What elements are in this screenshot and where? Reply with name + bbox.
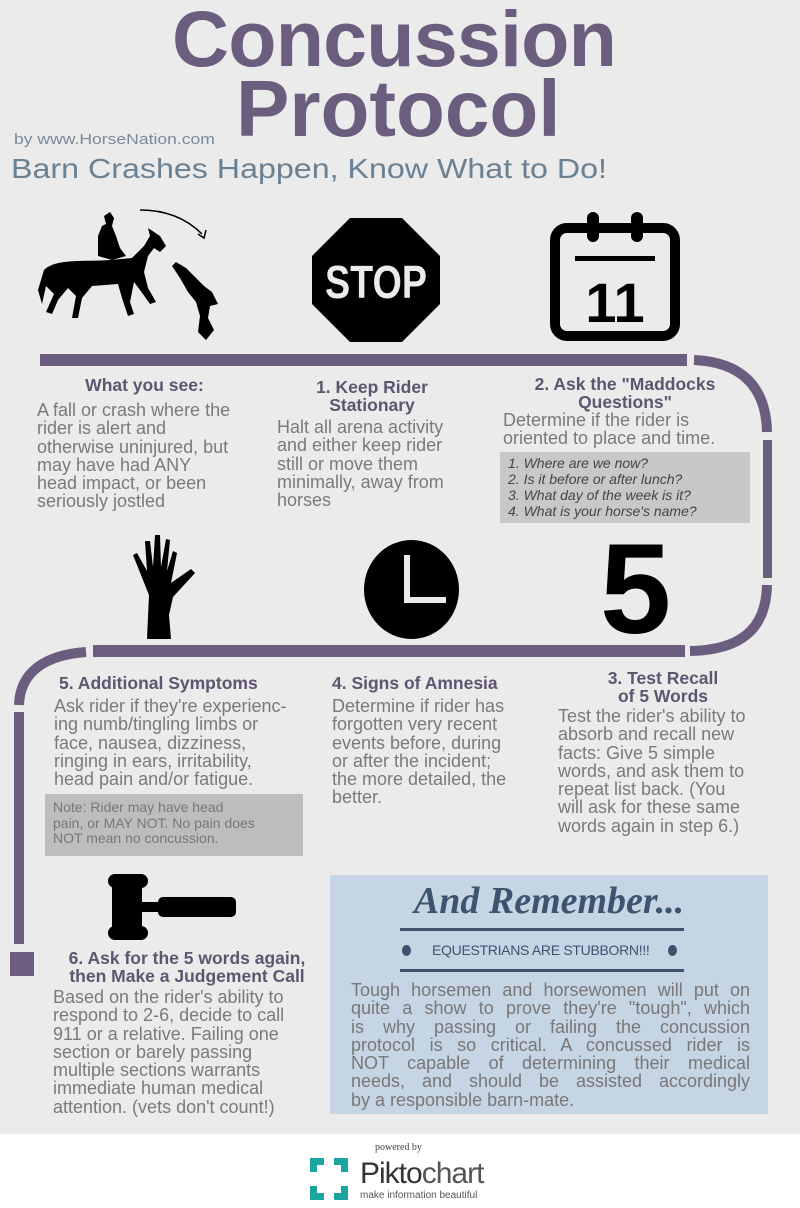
panel: step 6: 6. Ask for the 5 words again, (69, 948, 305, 968)
panel: step 1: Halt all arena activity (277, 417, 443, 437)
body text: quite a show to prove they're "tough", which (351, 998, 750, 1018)
logo: piktochart: make information beautiful (360, 1190, 477, 1201)
panel: step 4: 4. Signs of Amnesia (332, 673, 498, 693)
body text: protocol is so critical. A concussed rider is (351, 1035, 750, 1055)
panel: step 5: face, nausea, dizziness, (54, 733, 246, 753)
panel: step 1: horses (277, 490, 331, 510)
panel: step 5: 5. Additional Symptoms (59, 673, 258, 693)
panel: step 3: facts: Give 5 simple (558, 743, 715, 763)
title: Protocol (236, 64, 560, 153)
panel: step 2: Determine if the rider is (503, 410, 689, 430)
panel: step 3: Test the rider's ability to (558, 706, 746, 726)
panel: step 5 (45, 673, 303, 856)
byline: by www.HorseNation.com (14, 131, 215, 148)
panel: step 1: and either keep rider (277, 435, 442, 455)
panel: step 6: immediate human medical (53, 1078, 263, 1098)
body text: needs, and should be assisted accordingly (351, 1071, 750, 1091)
body text: Tough horsemen and horsewomen will put on (351, 980, 750, 1000)
panel: step 5: ing numb/tingling limbs or (54, 714, 258, 734)
panel: step 6: multiple sections warrants (53, 1060, 260, 1080)
panel: what you see (37, 375, 230, 511)
subtitle: Barn Crashes Happen, Know What to Do! (11, 153, 607, 184)
panel: step 2: 2. Ask the "Maddocks (535, 374, 715, 394)
panel: step 4: the more detailed, the (332, 769, 506, 789)
icon: hand (133, 535, 195, 639)
logo: piktochart (310, 1157, 484, 1201)
question list box: 2. Is it before or after lunch? (508, 471, 682, 487)
panel: step 5: ringing in ears, irritability, (54, 751, 252, 771)
panel: step 4: Determine if rider has (332, 696, 504, 716)
panel: step 6: then Make a Judgement Call (69, 966, 305, 986)
panel: step 6: respond to 2-6, decide to call (53, 1005, 284, 1025)
icon: number 5: 5 (600, 518, 671, 661)
panel: step 6: section or barely passing (53, 1042, 252, 1062)
title (172, 0, 616, 153)
heading: and remember: And Remember... (414, 880, 684, 922)
icon: clock (364, 540, 459, 639)
body text: NOT capable of determining their medical (351, 1053, 750, 1073)
panel: and remember (330, 875, 768, 1114)
panel: step 4: or after the incident; (332, 751, 491, 771)
panel: step 4: better. (332, 787, 382, 807)
note box (45, 794, 303, 856)
panel: what you see: otherwise uninjured, but (37, 437, 228, 457)
tagline: EQUESTRIANS ARE STUBBORN!!! (432, 942, 650, 958)
panel: step 3: absorb and recall new (558, 724, 734, 744)
panel: step 3: repeat list back. (You (558, 779, 725, 799)
body text: is why passing or failing the concussion (351, 1017, 750, 1037)
icon: stop sign (312, 218, 440, 342)
panel: step 6 (53, 948, 305, 1117)
panel: what you see: What you see: (85, 375, 204, 395)
panel: step 1: still or move them (277, 454, 418, 474)
logo: piktochart: Piktochart (360, 1157, 483, 1190)
panel: step 1: Stationary (329, 395, 415, 415)
panel: step 5: head pain and/or fatigue. (54, 769, 253, 789)
panel: step 3: 3. Test Recall (608, 668, 718, 688)
note box: Note: Rider may have head (53, 799, 223, 815)
panel: what you see: head impact, or been (37, 473, 206, 493)
panel: step 2 (500, 374, 750, 523)
question list box: 1. Where are we now? (508, 455, 648, 471)
icon: calendar (550, 212, 680, 341)
panel: what you see: A fall or crash where the (37, 400, 230, 420)
panel: step 5: Ask rider if they're experienc- (54, 696, 287, 716)
panel: what you see: seriously jostled (37, 491, 165, 511)
panel: step 3: will ask for these same (558, 797, 740, 817)
panel: step 1: minimally, away from (277, 472, 444, 492)
panel: step 6: 911 or a relative. Failing one (53, 1024, 279, 1044)
panel: step 3 (558, 668, 746, 836)
panel: step 6: attention. (vets don't count!) (53, 1097, 275, 1117)
panel: step 4: events before, during (332, 733, 501, 753)
panel: what you see: rider is alert and (37, 418, 166, 438)
body text (351, 980, 750, 1110)
footer (0, 1134, 800, 1208)
icon: calendar: 11 (585, 271, 645, 334)
panel: step 3: words, and ask them to (558, 761, 744, 781)
panel: step 6: Based on the rider's ability to (53, 987, 284, 1007)
panel: step 1: 1. Keep Rider (316, 377, 428, 397)
panel: step 3: words again in step 6.) (558, 816, 739, 836)
panel: step 2: oriented to place and time. (503, 428, 715, 448)
body text: by a responsible barn-mate. (351, 1090, 574, 1110)
panel: step 4: forgotten very recent (332, 714, 497, 734)
panel: step 2: Questions" (578, 392, 672, 412)
note box: NOT mean no concussion. (53, 830, 218, 846)
question list box (500, 452, 750, 523)
question list box: 3. What day of the week is it? (508, 487, 691, 503)
note box: pain, or MAY NOT. No pain does (53, 815, 255, 831)
panel: what you see: may have had ANY (37, 455, 191, 475)
footer: powered by (375, 1142, 422, 1153)
icon: gavel (108, 874, 236, 940)
panel: step 4 (332, 673, 506, 807)
icon: horse and falling rider (38, 209, 218, 340)
panel: step 1 (277, 377, 444, 510)
question list box: 4. What is your horse's name? (508, 503, 697, 519)
panel: step 3: of 5 Words (618, 686, 708, 706)
